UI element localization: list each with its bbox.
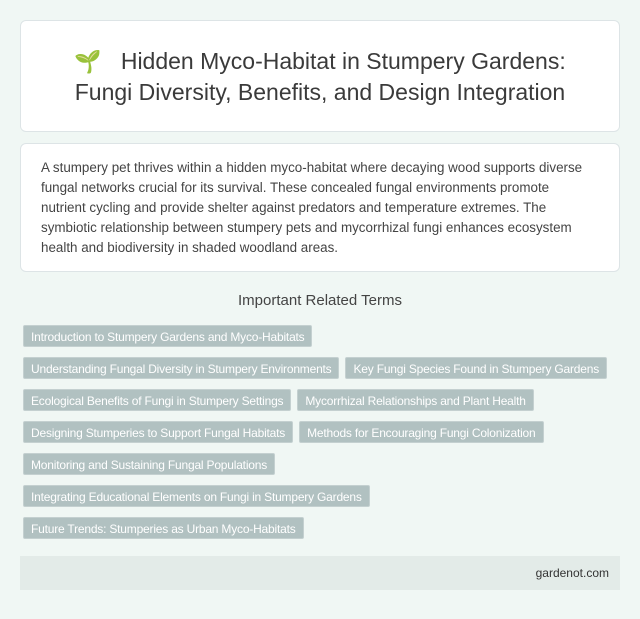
- terms list: Monitoring and Sustaining Fungal Populations: [31, 458, 267, 472]
- footer: gardenot.com: [536, 566, 609, 580]
- header card: [20, 20, 620, 132]
- terms list: Key Fungi Species Found in Stumpery Gardens: [353, 362, 599, 376]
- terms list: Ecological Benefits of Fungi in Stumpery Settings: [31, 394, 283, 408]
- terms list: Introduction to Stumpery Gardens and Myco-Habitats: [31, 330, 304, 344]
- terms list: Methods for Encouraging Fungi Colonization: [307, 426, 536, 440]
- terms list: Integrating Educational Elements on Fungi in Stumpery Gardens: [31, 490, 362, 504]
- section heading: Important Related Terms: [238, 292, 402, 309]
- terms list: Future Trends: Stumperies as Urban Myco-Habitats: [31, 522, 296, 536]
- title: [74, 48, 566, 105]
- description text: A stumpery pet thrives within a hidden myco-habitat where decaying wood supports diverse fungal networks crucial for its survival. These concealed fungal environments promote nutrient cycling and provide shelter against predators and temperature extremes. The symbiotic relationship between stumpery pets and mycorrhizal fungi enhances ecosystem health and biodiversity in shaded woodland areas.: [41, 160, 582, 254]
- title: Fungi Diversity, Benefits, and Design Integration: [75, 78, 565, 104]
- title: 🌱 Hidden Myco-Habitat in Stumpery Gardens:: [74, 48, 566, 74]
- footer: [20, 556, 620, 590]
- terms list: Understanding Fungal Diversity in Stumpery Environments: [31, 362, 331, 376]
- description card: [20, 143, 620, 272]
- terms list: Mycorrhizal Relationships and Plant Health: [305, 394, 526, 408]
- terms list: Designing Stumperies to Support Fungal Habitats: [31, 426, 285, 440]
- terms list: [23, 325, 607, 539]
